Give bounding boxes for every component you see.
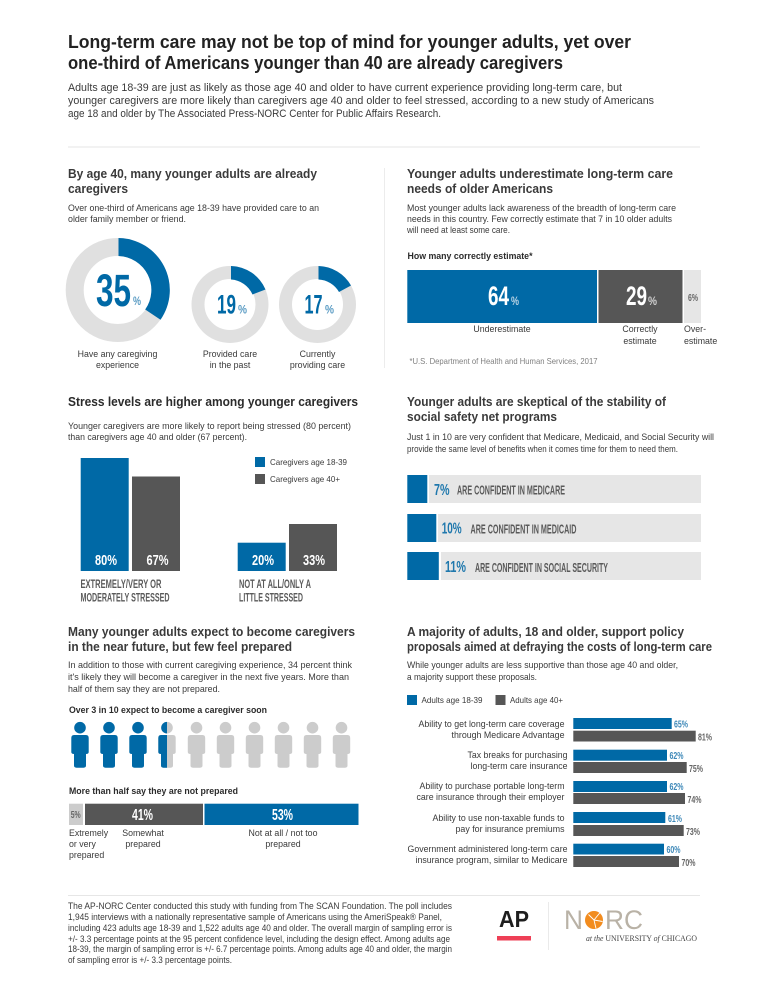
- row: employer insurance: 62%: [670, 781, 684, 793]
- title: one-third of Americans younger than 40 are already caregivers: [68, 52, 563, 73]
- text: expect to become caregivers: half of them say they are not prepared.: [68, 684, 220, 694]
- bar chart: stress: 33%: [303, 552, 325, 569]
- stacked bar: preparedness: 53%: [272, 807, 293, 824]
- row: tax breaks: 75%: [689, 763, 703, 775]
- logo: AP: AP: [499, 906, 529, 932]
- panel: stress levels: [68, 395, 358, 604]
- panel: expect to become caregivers: [68, 625, 358, 860]
- text: stress levels: Younger caregivers are more likely to report being stressed (80 percent): [68, 421, 351, 431]
- subheading: not prepared: More than half say they are not prepared: [69, 786, 238, 796]
- row: non-taxable funds: 73%: [686, 826, 700, 838]
- row: tax breaks: Tax breaks for purchasing: [468, 750, 568, 760]
- bar chart: stress: [80, 458, 337, 604]
- text: already caregivers: older family member or friend.: [68, 214, 186, 224]
- heading: expect to become caregivers: Many younger adults expect to become caregivers: [68, 625, 355, 639]
- bar chart: policies: [408, 718, 712, 869]
- donut: 19 percent: 19: [217, 290, 236, 320]
- footer methodology text: +/- 3.3 percentage points at the 95 percent confidence level, including the design effect. Among adults age: [68, 934, 450, 944]
- panel: already caregivers: [68, 167, 351, 370]
- footer methodology text: The AP-NORC Center conducted this study with funding from The SCAN Foundation. The poll includes: [68, 901, 453, 911]
- row: employer insurance: 74%: [688, 794, 702, 806]
- intro text: age 18 and older by The Associated Press-NORC Center for Public Affairs Research.: [68, 108, 441, 120]
- source note: *U.S. Department of Health and Human Services, 2017: [410, 356, 598, 366]
- bar: Medicare: 7%: [434, 482, 450, 499]
- donut labels: in the past: [210, 360, 251, 370]
- subheading: how many correctly estimate: How many correctly estimate*: [408, 251, 533, 261]
- heading: safety net: Younger adults are skeptical of the stability of: [407, 395, 667, 409]
- intro text: [68, 82, 654, 120]
- preparedness labels: Extremely: [69, 828, 109, 838]
- stacked bar: estimates: %: [511, 294, 519, 308]
- donut: 17 percent: %: [325, 302, 334, 316]
- donut: 35 percent: 35: [96, 265, 131, 316]
- stacked bar labels: [473, 324, 717, 346]
- legend: caregivers: Caregivers age 40+: [270, 474, 340, 484]
- bar: Social Security: 11%: [445, 559, 466, 576]
- bar: Medicare: [407, 475, 701, 503]
- donut: 17 percent: [286, 266, 351, 336]
- row: government program: [408, 844, 696, 869]
- bar chart: stress: 67%: [146, 552, 168, 569]
- legend: caregivers: [255, 457, 347, 484]
- row: non-taxable funds: 61%: [668, 813, 682, 825]
- heading: policy proposals: [407, 625, 712, 654]
- stacked bar: estimates: %: [648, 294, 657, 308]
- footer methodology text: of sampling error is +/- 3.3 percentage points.: [68, 955, 232, 965]
- panel: policy proposals: [407, 625, 712, 869]
- logo: NORC: N: [564, 905, 583, 935]
- text: already caregivers: [68, 203, 319, 224]
- donut: 17 percent: 17: [304, 290, 322, 320]
- stacked bar labels: estimate: [684, 336, 717, 346]
- donut labels: Have any caregiving: [78, 349, 157, 359]
- row: government program: Government administered long-term care: [408, 844, 568, 854]
- stacked bar labels: Over-: [684, 324, 706, 334]
- text: expect to become caregivers: In addition to those with current caregiving experience, 34 percent think: [68, 660, 352, 670]
- stacked bar: estimates: [407, 270, 701, 323]
- legend: adults: Adults age 40+: [510, 695, 563, 705]
- stacked bar labels: Correctly: [622, 324, 658, 334]
- intro text: Adults age 18-39 are just as likely as those age 40 and older to have current experience providing long-term care, but: [68, 82, 622, 94]
- legend: adults: [407, 695, 563, 705]
- donut labels: experience: [96, 360, 139, 370]
- bar chart: stress: NOT AT ALL/ONLY A: [239, 577, 311, 591]
- heading: expect to become caregivers: [68, 625, 355, 654]
- donut labels: providing care: [290, 360, 345, 370]
- bar: Social Security: [407, 552, 701, 580]
- bar chart: stress: MODERATELY STRESSED: [80, 590, 170, 604]
- preparedness labels: prepared: [265, 839, 301, 849]
- stacked bar labels: Underestimate: [473, 324, 531, 334]
- row: Medicare Advantage: Ability to get long-term care coverage: [418, 719, 565, 729]
- footer methodology text: including 423 adults age 18-39 and 1,522 adults age 40 and older. The overall margin of sampling error is: [68, 923, 453, 933]
- donut: 19 percent: %: [238, 302, 247, 316]
- row: employer insurance: Ability to purchase portable long-term: [420, 781, 564, 791]
- heading: safety net: [407, 395, 667, 424]
- heading: already caregivers: caregivers: [68, 182, 128, 196]
- preparedness labels: Not at all / not too: [249, 828, 318, 838]
- text: policy proposals: While younger adults are less supportive than those age 40 and older,: [407, 660, 678, 670]
- heading: policy proposals: A majority of adults, 18 and older, support policy: [407, 625, 684, 639]
- donut labels: [78, 349, 345, 370]
- bar chart: stress: LITTLE STRESSED: [239, 590, 303, 604]
- row: Medicare Advantage: 65%: [674, 718, 688, 730]
- row: tax breaks: [468, 750, 703, 775]
- row: non-taxable funds: pay for insurance premiums: [456, 824, 565, 834]
- logo: NORC: at the UNIVERSITY of CHICAGO: [586, 934, 697, 943]
- icons: people pictogram: [71, 722, 350, 768]
- panel: safety net: [407, 395, 714, 580]
- bar: Medicaid: [407, 514, 701, 542]
- row: Medicare Advantage: through Medicare Advantage: [452, 730, 565, 740]
- preparedness labels: Somewhat: [122, 828, 164, 838]
- stacked bar: preparedness: 5%: [71, 810, 81, 821]
- donut labels: Provided care: [203, 349, 257, 359]
- text: stress levels: [68, 421, 351, 442]
- heading: underestimate needs: needs of older Americans: [407, 182, 553, 196]
- heading: underestimate needs: Younger adults underestimate long-term care: [407, 167, 673, 181]
- row: government program: 60%: [666, 844, 681, 856]
- donut: 19 percent: [198, 266, 266, 336]
- text: policy proposals: a majority support these proposals.: [407, 672, 537, 682]
- bar: Medicaid: ARE CONFIDENT IN MEDICAID: [470, 522, 576, 536]
- footer methodology text: 18-39, the margin of sampling error is +/- 6.7 percentage points. Among adults age 40 and older, the margin: [68, 944, 452, 954]
- bar: Social Security: ARE CONFIDENT IN SOCIAL SECURITY: [475, 561, 608, 575]
- footer methodology text: 1,945 interviews with a nationally representative sample of Americans using the AmeriSpeak® Panel,: [68, 912, 442, 922]
- subheading: over 3 in 10: Over 3 in 10 expect to become a caregiver soon: [69, 705, 267, 715]
- row: employer insurance: [416, 781, 702, 806]
- heading: already caregivers: By age 40, many younger adults are already: [68, 167, 317, 181]
- stacked bar: estimates: 64: [488, 281, 509, 311]
- donut: 35 percent: [75, 238, 170, 333]
- row: government program: 70%: [682, 857, 696, 869]
- text: safety net: [407, 432, 714, 454]
- bar chart: stress: 20%: [252, 552, 274, 569]
- row: tax breaks: long-term care insurance: [470, 761, 568, 771]
- text: underestimate needs: Most younger adults lack awareness of the breadth of long-term care: [407, 203, 676, 213]
- text: safety net: Just 1 in 10 are very confident that Medicare, Medicaid, and Social Security will: [407, 432, 714, 442]
- text: underestimate needs: needs in this country. Few correctly estimate that 7 in 10 older adults: [407, 214, 672, 224]
- heading: already caregivers: [68, 167, 317, 196]
- logo: NORC: [564, 905, 697, 943]
- row: Medicare Advantage: 81%: [698, 732, 712, 744]
- stacked bar labels: estimate: [623, 336, 657, 346]
- panel: underestimate needs: [406, 167, 717, 366]
- row: non-taxable funds: Ability to use non-taxable funds to: [432, 813, 565, 823]
- row: tax breaks: 62%: [670, 750, 684, 762]
- row: employer insurance: care insurance through their employer: [416, 792, 565, 802]
- stacked bar: preparedness: [69, 804, 358, 825]
- row: Medicare Advantage: [418, 718, 712, 744]
- heading: expect to become caregivers: in the near future, but few feel prepared: [68, 640, 292, 654]
- title: Long-term care may not be top of mind for younger adults, yet over: [68, 31, 631, 52]
- heading: underestimate needs: [407, 167, 673, 196]
- text: already caregivers: Over one-third of Americans age 18-39 have provided care to an: [68, 203, 319, 213]
- donut: 35 percent: %: [133, 294, 141, 308]
- preparedness labels: prepared: [69, 850, 104, 860]
- text: expect to become caregivers: [68, 660, 352, 694]
- intro text: younger caregivers are more likely than caregivers age 40 and older to feel stressed, according to a new study of Americans: [68, 95, 654, 107]
- heading: safety net: social safety net programs: [407, 410, 557, 424]
- title: [68, 31, 631, 73]
- footer methodology text: [68, 901, 453, 965]
- logo: NORC: RC: [605, 905, 643, 935]
- text: stress levels: than caregivers age 40 and older (67 percent).: [68, 432, 247, 442]
- stacked bar: estimates: 6%: [688, 293, 698, 304]
- row: government program: insurance program, similar to Medicare: [416, 855, 568, 865]
- heading: policy proposals: proposals aimed at defraying the costs of long-term care: [407, 640, 712, 654]
- text: underestimate needs: [406, 203, 676, 235]
- text: underestimate needs: will need at least some care.: [406, 225, 510, 235]
- donut labels: Currently: [300, 349, 336, 359]
- bar: Medicare: ARE CONFIDENT IN MEDICARE: [457, 484, 565, 498]
- text: safety net: provide the same level of benefits when it comes time for them to need them.: [407, 444, 678, 454]
- stacked bar: estimates: 29: [626, 281, 647, 311]
- row: non-taxable funds: [432, 812, 700, 838]
- stacked bar: preparedness: 41%: [132, 807, 153, 824]
- bar chart: stress: EXTREMELY/VERY OR: [80, 577, 162, 591]
- text: policy proposals: [407, 660, 678, 682]
- heading: stress levels: Stress levels are higher among younger caregivers: [68, 395, 358, 409]
- text: expect to become caregivers: it's likely they will become a caregiver in the next five years. More than: [68, 672, 349, 682]
- preparedness labels: prepared: [125, 839, 161, 849]
- bar: Medicaid: 10%: [442, 520, 462, 538]
- bar chart: stress: 80%: [95, 552, 117, 569]
- legend: caregivers: Caregivers age 18-39: [270, 457, 347, 467]
- preparedness labels: or very: [69, 839, 96, 849]
- preparedness labels: [69, 828, 318, 860]
- legend: adults: Adults age 18-39: [422, 695, 483, 705]
